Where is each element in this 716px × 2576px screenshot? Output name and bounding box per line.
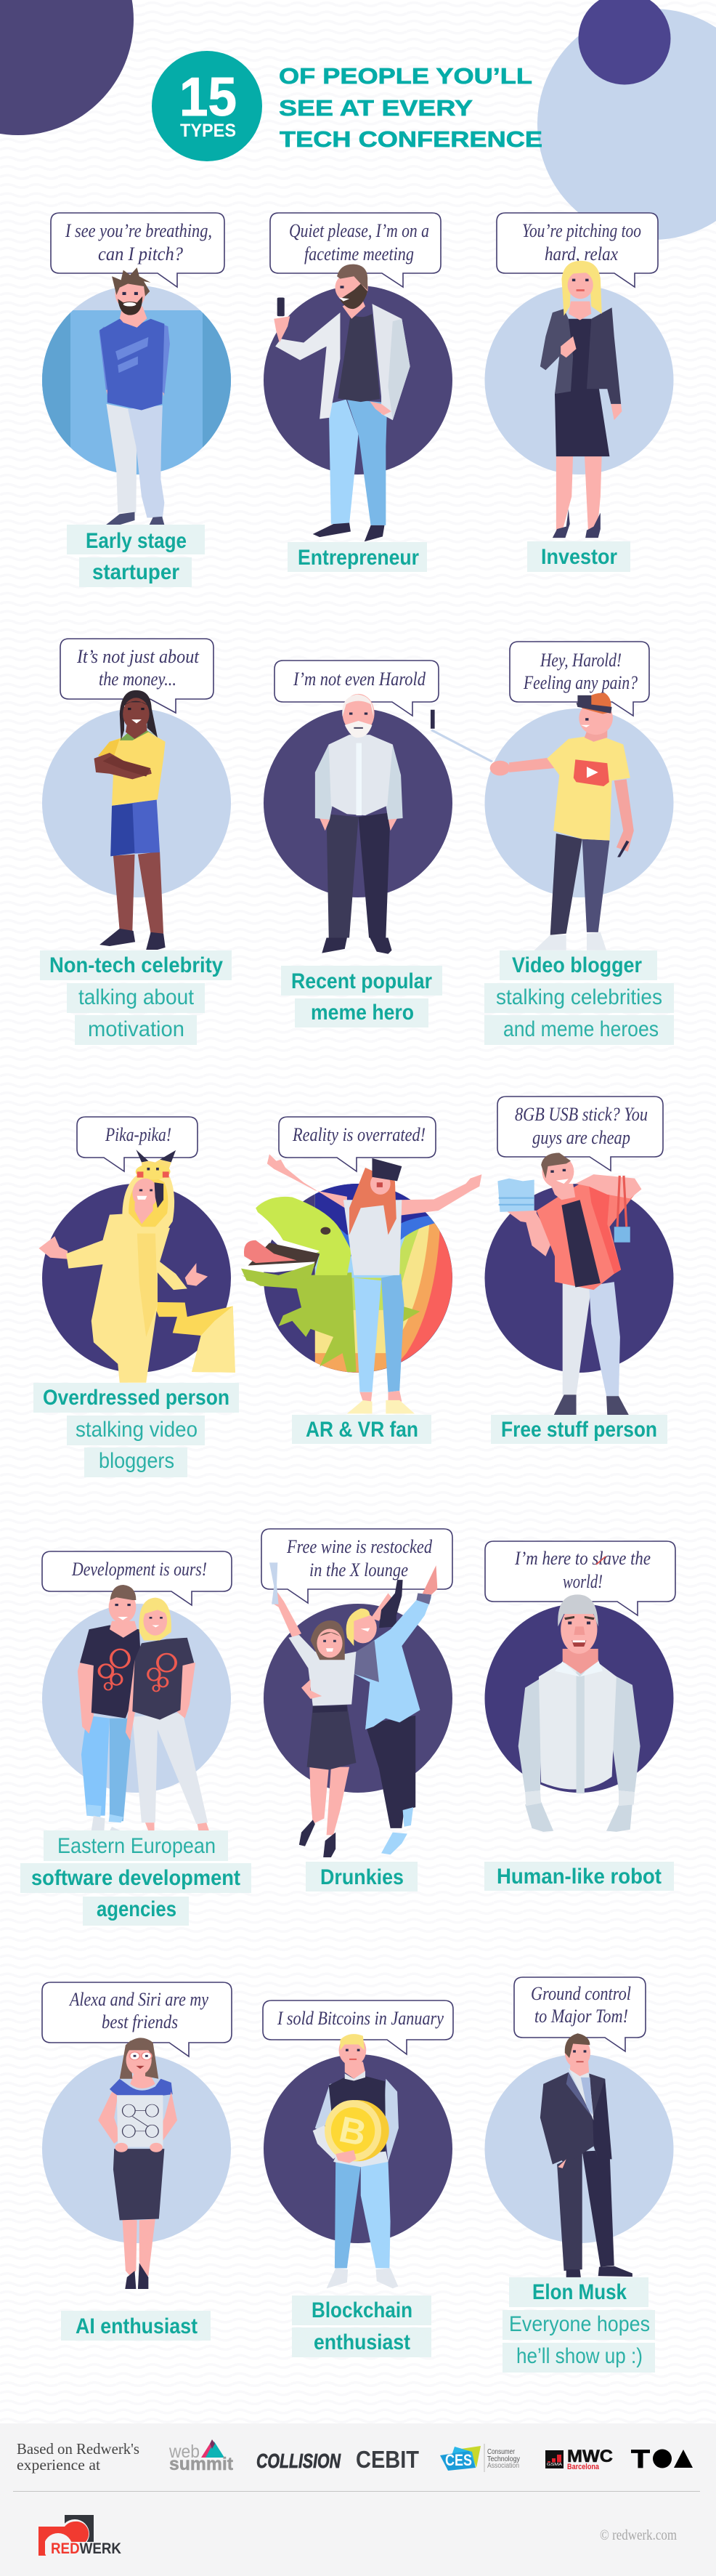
circle background [485, 286, 674, 475]
label: Everyone hopes [509, 2312, 650, 2336]
circle background [264, 2054, 452, 2243]
badge: 15 types [152, 51, 262, 161]
label [306, 1862, 418, 1891]
character: pikachu costume [38, 1150, 235, 1383]
label: Elon Musk [532, 2280, 627, 2304]
label: Non-tech celebrity [49, 953, 223, 977]
speech bubble: I see you’re breathing, [65, 220, 212, 241]
logo: TOA: T [631, 2445, 650, 2474]
speech bubble: to Major Tom! [534, 2006, 628, 2027]
bitcoin symbol: B [335, 2109, 370, 2154]
speech bubble: I’m here to slave the [514, 1548, 651, 1569]
panel: Drunkies [261, 1529, 452, 1891]
speech bubble: I’m not even Harold [293, 669, 426, 690]
circle background [485, 1184, 674, 1373]
panel: Video blogger [431, 642, 674, 1045]
panel: Entrepreneur [264, 213, 452, 572]
logo: CES CTA: Technology [487, 2455, 521, 2463]
label: Overdressed person [43, 1386, 229, 1410]
speech bubble [497, 213, 658, 287]
logo: CES CTA: Association [487, 2461, 519, 2470]
logo: Redwerk: REDWERK [51, 2540, 121, 2557]
logo: MWC Barcelona [545, 2447, 613, 2471]
panel: Recent popular meme hero [264, 661, 452, 1027]
panel: Overdressed person [33, 1117, 239, 1477]
circle background with room [42, 286, 231, 475]
label [292, 2296, 431, 2357]
logo: TOA [631, 2445, 693, 2474]
character: celebrity [94, 690, 166, 950]
title: OF PEOPLE YOU’LL [279, 63, 532, 89]
speech bubble: hard, relax [545, 243, 618, 265]
character: meme hero [315, 694, 403, 954]
logo: CEBIT: CEBIT [356, 2446, 419, 2473]
character: entrepreneur [274, 265, 410, 541]
header decorative circle left [0, 0, 134, 135]
speech bubble: Hey, Harold! [540, 650, 622, 671]
logo: Collision: COLLISION [256, 2450, 341, 2472]
panel: Eastern European software development agencies [20, 1551, 251, 1926]
logo: CES CTA: CES [445, 2451, 472, 2469]
character: free stuff person [497, 1153, 641, 1415]
copyright: © redwerk.com [600, 2527, 677, 2543]
speech bubble [274, 661, 439, 716]
label: stalking celebrities [496, 985, 662, 1009]
label: Eastern European [57, 1834, 216, 1858]
speech bubble: Reality is overrated! [292, 1124, 426, 1145]
label: and meme heroes [503, 1017, 659, 1041]
speech bubble: 8GB USB stick? You [515, 1104, 648, 1125]
panel: Non-tech celebrity [40, 639, 232, 1045]
logo: Web Summit [168, 2439, 234, 2474]
speech bubble [270, 213, 441, 287]
speech bubble [60, 639, 213, 713]
label: Free stuff person [501, 1418, 657, 1442]
panel: AI enthusiast [42, 1982, 232, 2341]
logo: CES CTA: Consumer [487, 2447, 515, 2456]
label: Entrepreneur [298, 546, 419, 570]
speech bubble [261, 1529, 452, 1603]
character: investor [540, 261, 622, 538]
label: Investor [541, 545, 617, 569]
circle background [42, 2054, 231, 2243]
character: drunk couple [269, 1562, 437, 1857]
title: TECH CONFERENCE [280, 126, 542, 152]
footer intro text: Based on Redwerk's [17, 2440, 139, 2458]
logo: Redwerk [38, 2515, 121, 2562]
character: bitcoin holder [313, 2034, 399, 2288]
title [279, 63, 542, 152]
speech bubble [497, 1097, 663, 1171]
label [40, 950, 232, 1045]
speech bubble: Ground control [531, 1983, 631, 2004]
footer [0, 2423, 716, 2576]
label: Early stage [86, 529, 187, 553]
speech bubble: guys are cheap [532, 1127, 630, 1148]
circle background [264, 1184, 452, 1373]
speech bubble [42, 1551, 232, 1605]
label [20, 1830, 251, 1926]
speech bubble: Alexa and Siri are my [68, 1989, 208, 2010]
speech bubble: Development is ours! [71, 1559, 207, 1580]
speech bubble: It’s not just about [76, 646, 200, 667]
circle background [42, 708, 231, 897]
logo: Web Summit: summit [169, 2454, 234, 2474]
panel: AR and VR fan [241, 1117, 481, 1444]
label: Blockchain [312, 2298, 412, 2322]
label [503, 2277, 655, 2373]
circle background [264, 1604, 452, 1793]
title: SEE AT EVERY [279, 95, 473, 121]
badge: 15 types: 15 [179, 66, 237, 127]
panel: Human-like robot [484, 1541, 675, 1891]
label: Drunkies [320, 1865, 404, 1889]
label: stalking video [76, 1418, 198, 1442]
label: talking about [78, 985, 195, 1009]
footer intro text: experience at [17, 2456, 100, 2474]
character: video blogger with selfie stick [431, 693, 634, 950]
label [527, 541, 630, 572]
label: software development [31, 1866, 240, 1890]
circle background [42, 1184, 231, 1373]
panel: Elon Musk [485, 1977, 674, 2373]
speech bubble: the money... [99, 669, 176, 690]
panel: Early stage startuper [42, 213, 231, 587]
label: agencies [97, 1897, 176, 1921]
speech bubble: You’re pitching too [522, 220, 641, 241]
label: startuper [92, 560, 179, 584]
speech bubble [263, 2000, 453, 2054]
logo: MWC Barcelona: GSMA [547, 2463, 563, 2467]
label [281, 966, 442, 1027]
badge: 15 types: TYPES [180, 121, 236, 141]
speech bubble: best friends [102, 2011, 178, 2032]
panel: Investor [485, 213, 674, 572]
label: Recent popular [291, 969, 432, 993]
label: enthusiast [314, 2330, 410, 2354]
speech bubble: in the X lounge [309, 1559, 408, 1580]
circle background [485, 708, 674, 897]
speech bubble [279, 1117, 436, 1171]
label: meme hero [311, 1001, 414, 1025]
panel: Blockchain enthusiast [263, 2000, 453, 2357]
speech bubble [510, 642, 649, 716]
speech bubble [77, 1117, 198, 1171]
label: AI enthusiast [76, 2314, 198, 2338]
label: motivation [88, 1017, 184, 1041]
logo: CES CTA [440, 2444, 521, 2472]
speech bubble [51, 213, 224, 287]
label: he’ll show up :) [516, 2344, 643, 2368]
speech bubble: Quiet please, I’m on a [289, 220, 429, 241]
circle background [485, 2054, 674, 2243]
circle background [264, 708, 452, 897]
label: Human-like robot [497, 1865, 662, 1889]
header decorative circle right dark [578, 0, 671, 84]
character: AI enthusiast [98, 2038, 177, 2289]
circle background [42, 1604, 231, 1793]
label: Video blogger [512, 953, 642, 977]
logo: Web Summit: web [168, 2442, 200, 2462]
label: AR & VR fan [306, 1418, 418, 1442]
footer intro text [17, 2440, 139, 2474]
speech bubble: Pika-pika! [105, 1124, 171, 1145]
speech bubble [42, 1982, 232, 2056]
speech bubble [514, 1977, 646, 2051]
label: bloggers [99, 1449, 174, 1473]
character: developer couple [78, 1585, 209, 1831]
speech bubble: Feeling any pain? [523, 672, 638, 693]
character: robot [518, 1594, 640, 1832]
character: suited man [540, 2033, 632, 2277]
logo: MWC Barcelona: Barcelona [567, 2463, 600, 2471]
speech bubble: facetime meeting [304, 243, 414, 265]
character: startuper [99, 267, 170, 525]
character: VR fan with dinosaur and rainbow [241, 1154, 481, 1413]
speech bubble: world! [563, 1571, 603, 1592]
panel: Free stuff person [485, 1097, 674, 1444]
label [33, 1383, 239, 1477]
circle background [485, 1604, 674, 1793]
label [484, 950, 674, 1045]
header decorative circle right light [537, 9, 716, 240]
label [67, 525, 205, 587]
speech bubble: I sold Bitcoins in January [277, 2008, 444, 2029]
logo: MWC Barcelona: MWC [567, 2447, 613, 2466]
speech bubble: can I pitch? [98, 243, 183, 265]
speech bubble [485, 1541, 675, 1615]
speech bubble: Free wine is restocked [286, 1536, 433, 1557]
circle background [264, 286, 452, 475]
